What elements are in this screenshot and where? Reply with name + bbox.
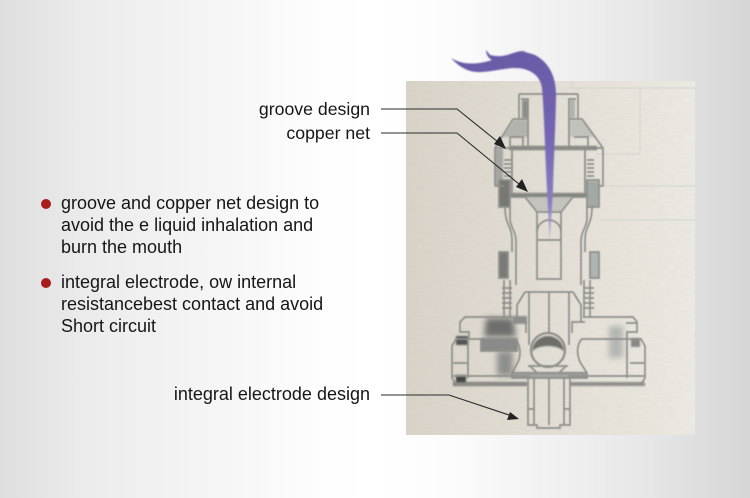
text block: bullet 2: resistancebest contact and avoid: [61, 294, 323, 314]
curved waist walls: [499, 207, 599, 285]
arrow: copper net: [381, 133, 528, 192]
funnel and inner tube: [510, 197, 587, 279]
label: integral electrode design: integral electrode design: [174, 384, 370, 404]
label: groove design: groove design: [259, 99, 370, 119]
bullet marker 1: [41, 199, 51, 209]
arrow: groove design: [381, 109, 506, 149]
text block: bullet 2: [61, 272, 323, 336]
arrow: integral electrode design: [381, 395, 519, 420]
text block: bullet 2: integral electrode, ow internal: [61, 272, 296, 292]
top cap: [519, 94, 578, 146]
shaded areas: [453, 100, 645, 386]
text block: bullet 1: burn the mouth: [61, 237, 182, 257]
atomizer drawing: [452, 94, 645, 428]
springs: [504, 160, 594, 176]
text block: bullet 2: Short circuit: [61, 316, 156, 336]
text block: bullet 1: avoid the e liquid inhalation and: [61, 215, 313, 235]
label: copper net: copper net: [286, 123, 370, 143]
base left: [452, 317, 530, 384]
faint background schematic lines: [572, 81, 695, 220]
bullet marker 2: [41, 278, 51, 288]
smoke plume: [451, 50, 556, 242]
text block: bullet 1: groove and copper net design to: [61, 193, 319, 213]
lower springs: [502, 280, 594, 318]
text block: bullet 1: [61, 193, 319, 257]
panel: paper background: [406, 81, 695, 435]
chamber: [510, 148, 587, 194]
base right: [568, 317, 645, 384]
plate and stem: [512, 373, 587, 428]
center post: [514, 292, 585, 345]
center circle: [531, 333, 565, 367]
side walls: [495, 148, 603, 207]
shoulder: [495, 119, 603, 148]
